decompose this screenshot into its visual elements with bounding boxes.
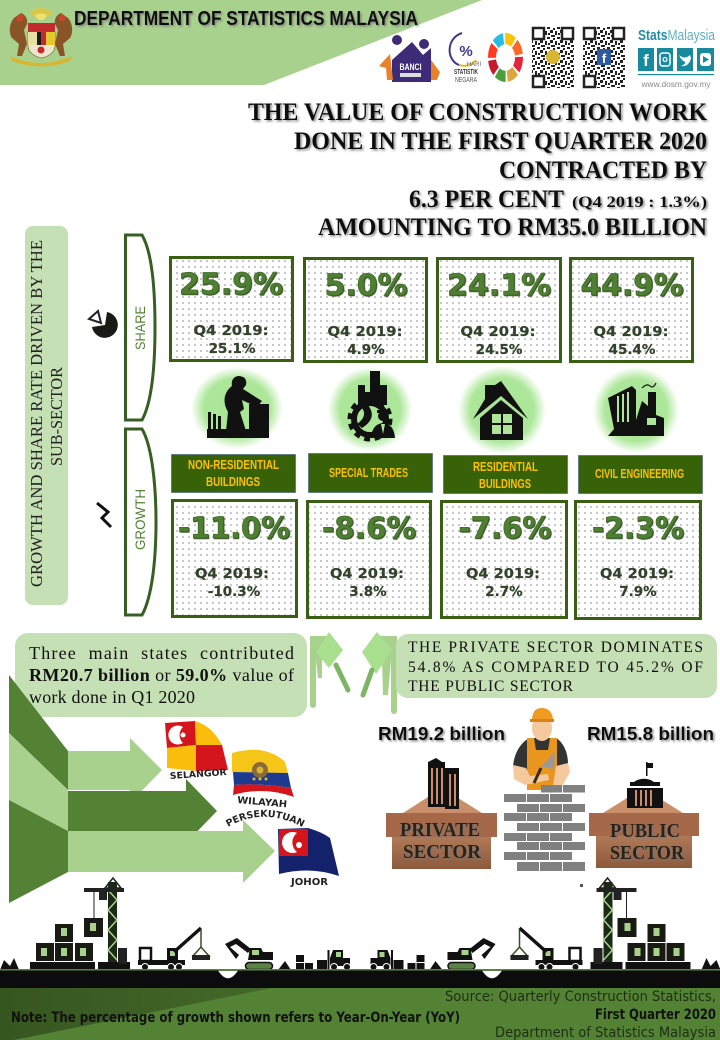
share card: special trades: 5.0% [324, 268, 408, 302]
callout: three main states: Three main states contributed [29, 643, 294, 663]
share card: special trades: Q4 2019: [328, 324, 402, 340]
growth card: special trades [308, 502, 430, 618]
share card: residential [438, 258, 560, 362]
main headline: DONE IN THE FIRST QUARTER 2020 [294, 128, 707, 155]
side panel: growth and share heading: SUB-SECTOR [47, 366, 66, 466]
label: non-residential buildings: BUILDINGS [206, 474, 260, 489]
share card: special trades: 4.9% [347, 342, 385, 358]
share card: non-residential [170, 258, 292, 360]
main headline [248, 99, 708, 241]
growth card: non-residential: -10.3% [208, 584, 261, 600]
main headline: THE VALUE OF CONSTRUCTION WORK [248, 99, 708, 126]
growth card: civil engineering: -2.3% [592, 511, 684, 545]
logo: Hari Statistik Negara: HARI [467, 62, 481, 68]
icon: civil engineering factory [593, 367, 679, 453]
logo: Banci [379, 35, 440, 82]
callout: three main states [15, 633, 307, 717]
bracket: share: SHARE [132, 306, 148, 350]
flag: Wilayah Persekutuan [226, 750, 305, 827]
StatsMalaysia social block: www.dosm.gov.my [640, 80, 710, 89]
logo: Hari Statistik Negara: NEGARA [455, 77, 477, 84]
icon: coat of arms [10, 8, 72, 66]
side panel: growth and share heading: GROWTH AND SHARE RATE DRIVEN BY THE [27, 240, 46, 587]
fan arrow to Johor [9, 800, 275, 903]
growth card: special trades: 3.8% [349, 584, 387, 600]
source text [445, 989, 716, 1040]
flag: Wilayah Persekutuan: WILAYAH [237, 795, 288, 810]
public sector house: PUBLIC [610, 820, 680, 842]
growth card: residential: Q4 2019: [466, 566, 540, 582]
bracket: growth: GROWTH [132, 489, 148, 550]
label: residential buildings [444, 456, 568, 494]
amount: private: RM19.2 billion [378, 724, 505, 744]
growth card: special trades: -8.6% [322, 511, 416, 545]
main headline: AMOUNTING TO RM35.0 BILLION [318, 214, 707, 241]
private sector house: SECTOR [403, 841, 482, 863]
QR code 2: f [602, 51, 607, 66]
growth card: civil engineering: Q4 2019: [600, 566, 674, 582]
icon: non-residential worker [191, 367, 283, 449]
icon: growth line [97, 503, 111, 527]
share card: civil engineering: Q4 2019: [594, 324, 668, 340]
flag: Johor [278, 828, 339, 888]
share card: residential: 24.1% [447, 268, 551, 302]
main headline: CONTRACTED BY [499, 157, 707, 184]
flag: Selangor [165, 721, 228, 782]
public sector house [589, 762, 699, 868]
header banner [0, 0, 482, 85]
label: residential buildings: BUILDINGS [479, 476, 531, 491]
StatsMalaysia social block: f [643, 51, 649, 70]
growth card: residential: 2.7% [485, 584, 523, 600]
label: civil engineering [578, 456, 702, 494]
main headline: (Q4 2019 : 1.3%) [572, 194, 707, 211]
note text: Note: The percentage of growth shown refers to Year-On-Year (YoY) [11, 1010, 460, 1026]
callout: three main states: work done in Q1 2020 [29, 687, 195, 707]
logo: Hari Statistik Negara: % [459, 43, 473, 60]
main headline: 6.3 PER CENT [409, 186, 564, 213]
growth card: non-residential [172, 500, 296, 616]
callout: three main states: RM20.7 billion or 59.0% value of [29, 665, 294, 685]
growth card: residential: -7.6% [458, 511, 552, 545]
callout: private sector dominates: THE PRIVATE SECTOR DOMINATES [408, 639, 703, 656]
share card: non-residential: 25.1% [209, 341, 256, 357]
private sector house: PRIVATE [400, 819, 480, 841]
growth card: non-residential: Q4 2019: [195, 566, 269, 582]
callout: private sector dominates: 54.8% AS COMPARED TO 45.2% OF [408, 659, 703, 676]
footer band [0, 988, 720, 1040]
label: non-residential buildings [172, 454, 296, 492]
growth card: civil engineering: 7.9% [619, 584, 657, 600]
flag: Selangor: SELANGOR [170, 768, 227, 782]
icon: paint brush right [362, 632, 397, 714]
label: civil engineering: CIVIL ENGINEERING [595, 466, 684, 481]
share card: residential: Q4 2019: [460, 324, 536, 340]
icon: special trades gear and towers [328, 367, 412, 451]
bracket: growth [126, 429, 156, 615]
share card: civil engineering [570, 258, 692, 362]
growth card: non-residential: -11.0% [178, 511, 290, 545]
construction skyline [0, 878, 720, 988]
callout: private sector dominates: THE PUBLIC SECTOR [408, 678, 574, 695]
logo: Banci: BANCI [400, 62, 422, 72]
logo: SDG wheel [492, 39, 519, 76]
illustration: bricklayer [504, 708, 585, 871]
private sector house [386, 758, 497, 869]
growth card: civil engineering [576, 502, 700, 618]
bracket: share [126, 235, 155, 420]
footer dark wedge [0, 988, 272, 1040]
header title: DEPARTMENT OF STATISTICS MALAYSIA [74, 7, 418, 30]
fan arrow to Wilayah Persekutuan [9, 733, 217, 843]
share card: residential: 24.5% [476, 342, 523, 358]
share card: special trades [304, 258, 426, 362]
label: residential buildings: RESIDENTIAL [473, 459, 538, 474]
side panel: growth and share heading [25, 226, 68, 605]
icon: pie chart [89, 311, 118, 338]
share card: civil engineering: 44.9% [580, 268, 684, 302]
label: special trades [308, 454, 432, 492]
logo: Hari Statistik Negara: STATISTIK [454, 69, 478, 76]
QR code 1 [532, 27, 574, 88]
flag: Johor: JOHOR [290, 877, 329, 888]
logo: Hari Statistik Negara [450, 33, 481, 84]
public sector house: SECTOR [610, 842, 684, 864]
share card: civil engineering: 45.4% [609, 342, 656, 358]
callout: private sector dominates [396, 634, 717, 698]
icon: residential house [458, 366, 546, 454]
flag: Wilayah Persekutuan: PERSEKUTUAN [226, 810, 305, 827]
amount: public: RM15.8 billion [587, 724, 714, 744]
growth card: special trades: Q4 2019: [330, 566, 404, 582]
share card: non-residential: Q4 2019: [194, 323, 268, 339]
QR code 2 [583, 27, 625, 88]
icon: paint brush left [310, 632, 348, 708]
StatsMalaysia social block [638, 28, 716, 89]
label: special trades: SPECIAL TRADES [329, 465, 408, 480]
fan arrow to Selangor [9, 675, 162, 803]
label: non-residential buildings: NON-RESIDENTIAL [188, 457, 279, 472]
growth card: residential [442, 502, 566, 618]
share card: non-residential: 25.9% [179, 267, 283, 301]
